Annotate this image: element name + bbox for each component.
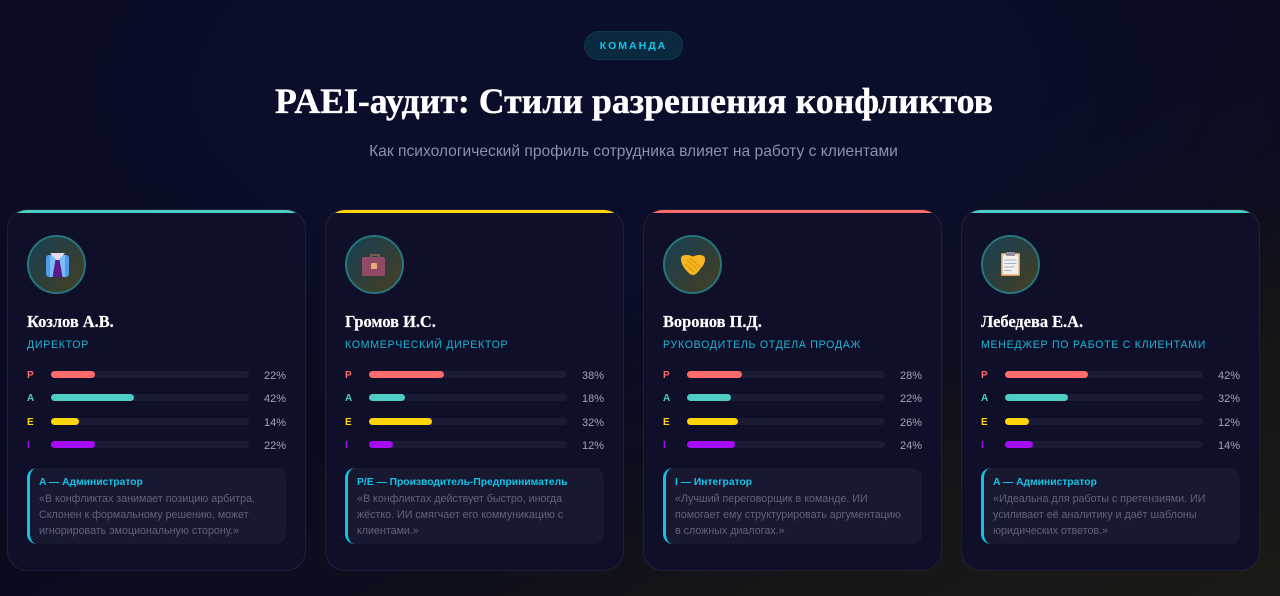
metric P: 28% (900, 370, 922, 382)
metric A: A (981, 393, 988, 404)
role: РУКОВОДИТЕЛЬ ОТДЕЛА ПРОДАЖ (663, 339, 861, 351)
callout: Склонен к формальному решению, может (39, 509, 249, 521)
panel: Лебедева (961, 209, 1260, 571)
role: МЕНЕДЖЕР ПО РАБОТЕ С КЛИЕНТАМИ (981, 339, 1206, 351)
icon: handshake (663, 235, 722, 294)
metric P: 38% (582, 370, 604, 382)
metric A: 32% (1218, 393, 1240, 405)
callout: A — Администратор (993, 477, 1097, 488)
metric P: 42% (1218, 370, 1240, 382)
badge: КОМАНДА (600, 40, 667, 52)
title: PAEI-аудит: Стили разрешения конфликтов (275, 81, 993, 121)
name: Громов И.С. (345, 312, 436, 331)
metric E (981, 417, 1240, 429)
metric I: I (981, 440, 984, 451)
callout: жёстко. ИИ смягчает его коммуникацию с (357, 509, 563, 521)
metric E (663, 417, 922, 429)
panel: Воронов (643, 209, 942, 571)
top accent (7, 209, 306, 213)
metric I: 12% (582, 440, 604, 452)
callout: помогает ему структурировать аргументацию (675, 509, 901, 521)
icon: shirt and tie (27, 235, 86, 294)
metric E (27, 417, 286, 429)
metric A (345, 393, 604, 405)
callout (981, 468, 1240, 544)
callout: «Лучший переговорщик в команде. ИИ (675, 493, 868, 505)
callout: «В конфликтах занимает позицию арбитра. (39, 493, 255, 505)
metric E: E (345, 417, 352, 428)
metric I: I (345, 440, 348, 451)
callout (345, 468, 604, 544)
metric A: 22% (900, 393, 922, 405)
role: ДИРЕКТОР (27, 339, 89, 351)
metric I (663, 440, 922, 452)
metric A: A (663, 393, 670, 404)
metric I (345, 440, 604, 452)
top accent (643, 209, 942, 213)
name: Воронов П.Д. (663, 312, 762, 331)
metric E: E (663, 417, 670, 428)
panel: Козлов (7, 209, 306, 571)
metric E (345, 417, 604, 429)
metric A (27, 393, 286, 405)
callout: усиливает её аналитику и даёт шаблоны (993, 509, 1196, 521)
metric A: A (345, 393, 352, 404)
top accent (325, 209, 624, 213)
name: Лебедева Е.А. (981, 312, 1083, 331)
metric E: 12% (1218, 417, 1240, 429)
metric A: A (27, 393, 34, 404)
metric E: 32% (582, 417, 604, 429)
metric P: P (981, 370, 988, 381)
metric P (27, 370, 286, 382)
callout: «Идеальна для работы с претензиями. ИИ (993, 493, 1205, 505)
callout (663, 468, 922, 544)
metric E: E (981, 417, 988, 428)
metric E: 14% (264, 417, 286, 429)
callout: A — Администратор (39, 477, 143, 488)
metric I (981, 440, 1240, 452)
icon: clipboard (981, 235, 1040, 294)
name: Козлов А.В. (27, 312, 114, 331)
metric P (981, 370, 1240, 382)
metric A: 18% (582, 393, 604, 405)
metric I: I (27, 440, 30, 451)
metric P (345, 370, 604, 382)
metric I: I (663, 440, 666, 451)
callout: юридических ответов.» (993, 525, 1108, 537)
badge (584, 31, 683, 60)
metric A (981, 393, 1240, 405)
metric E: 26% (900, 417, 922, 429)
metric I (27, 440, 286, 452)
metric A (663, 393, 922, 405)
metric P: P (27, 370, 34, 381)
callout: P/E — Производитель-Предприниматель (357, 477, 568, 488)
metric P: 22% (264, 370, 286, 382)
callout: I — Интегратор (675, 477, 752, 488)
metric E: E (27, 417, 34, 428)
panel: Громов (325, 209, 624, 571)
metric P (663, 370, 922, 382)
metric I: 14% (1218, 440, 1240, 452)
subtitle: Как психологический профиль сотрудника влияет на работу с клиентами (369, 143, 898, 160)
metric A: 42% (264, 393, 286, 405)
icon: briefcase (345, 235, 404, 294)
metric I: 22% (264, 440, 286, 452)
role: КОММЕРЧЕСКИЙ ДИРЕКТОР (345, 339, 508, 351)
top accent (961, 209, 1260, 213)
callout (27, 468, 286, 544)
metric I: 24% (900, 440, 922, 452)
callout: игнорировать эмоциональную сторону.» (39, 525, 239, 537)
metric P: P (663, 370, 670, 381)
callout: клиентами.» (357, 525, 419, 537)
metric P: P (345, 370, 352, 381)
callout: «В конфликтах действует быстро, иногда (357, 493, 562, 505)
callout: в сложных диалогах.» (675, 525, 785, 537)
